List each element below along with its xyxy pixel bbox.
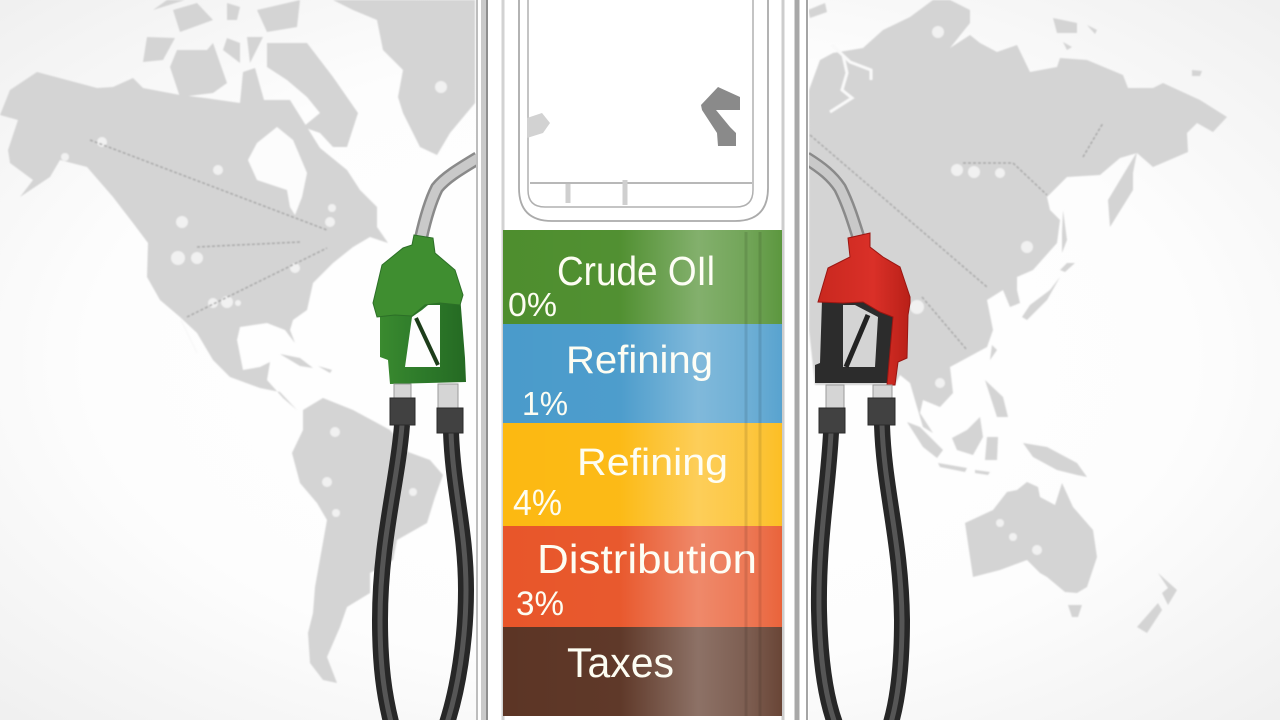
map: dashed route lines <box>90 123 1103 350</box>
display screen inner <box>528 0 753 207</box>
map: white inlets <box>181 45 871 353</box>
band: refining yellow: 4% <box>513 482 562 523</box>
right rail <box>783 0 807 720</box>
hose: left outer <box>380 425 402 720</box>
map: Japan and Sakhalin <box>1022 210 1075 320</box>
left rail <box>477 0 503 720</box>
fuel pump column <box>476 0 809 720</box>
band: taxes: Taxes <box>567 639 674 686</box>
smudge on display <box>701 87 740 146</box>
map: Arctic Siberian islands <box>808 3 1202 76</box>
nozzle lower body <box>380 295 466 384</box>
icon: green fuel nozzle <box>373 235 466 433</box>
band: taxes <box>503 627 782 716</box>
map: North America <box>0 68 388 410</box>
map: Greenland <box>333 0 475 155</box>
map: Maritime Southeast Asia <box>907 345 1087 477</box>
icon: red fuel nozzle <box>815 233 910 433</box>
band: crude oil: Crude OIl <box>557 248 715 294</box>
band: crude oil <box>503 230 782 324</box>
glass sheen <box>503 230 782 716</box>
hose: right inner <box>819 433 836 720</box>
marks on display <box>568 180 625 205</box>
band: refining blue <box>503 324 782 423</box>
map: Caribbean islands <box>280 354 332 373</box>
left hoses <box>380 425 466 720</box>
map: Kamchatka <box>1108 152 1137 227</box>
nozzle black body <box>815 300 897 383</box>
band: refining blue: Refining <box>566 339 713 382</box>
glass vertical strip <box>746 232 760 716</box>
map: Baffin and Arctic islands <box>143 0 358 147</box>
price breakdown stack <box>503 230 782 716</box>
map: Tasmania <box>1068 605 1082 617</box>
hose: left inner <box>446 432 466 720</box>
hose: right outer <box>882 425 902 720</box>
display baseline <box>530 182 752 184</box>
map: Hudson Bay <box>248 127 307 215</box>
band: crude oil: 0% <box>508 286 557 323</box>
band: refining blue: 1% <box>522 385 568 422</box>
map: New Zealand <box>1137 573 1177 633</box>
nozzle top shell <box>373 235 463 317</box>
pump body <box>476 0 809 720</box>
map: Australia <box>965 482 1097 593</box>
trigger lever <box>416 318 438 365</box>
fitting: silver collars <box>826 385 892 408</box>
fitting: silver collars <box>394 384 458 408</box>
display screen frame <box>519 0 768 221</box>
band: refining yellow <box>503 423 782 526</box>
band: distribution <box>503 526 782 627</box>
band: refining yellow: Refining <box>577 442 728 484</box>
nozzle red shell <box>818 233 910 385</box>
fitting: black couplers <box>819 398 895 433</box>
band: distribution: 3% <box>516 585 564 623</box>
map: Eurasia <box>809 0 1227 433</box>
faint island on display <box>527 113 550 138</box>
spout: red nozzle <box>806 158 858 236</box>
spout: green nozzle <box>421 158 478 238</box>
right hoses <box>819 425 902 720</box>
map: South America <box>292 398 443 683</box>
map: city dots <box>61 26 1042 555</box>
fitting: black couplers <box>390 398 463 433</box>
trigger lever <box>846 315 868 367</box>
band: distribution: Distribution <box>537 536 757 582</box>
